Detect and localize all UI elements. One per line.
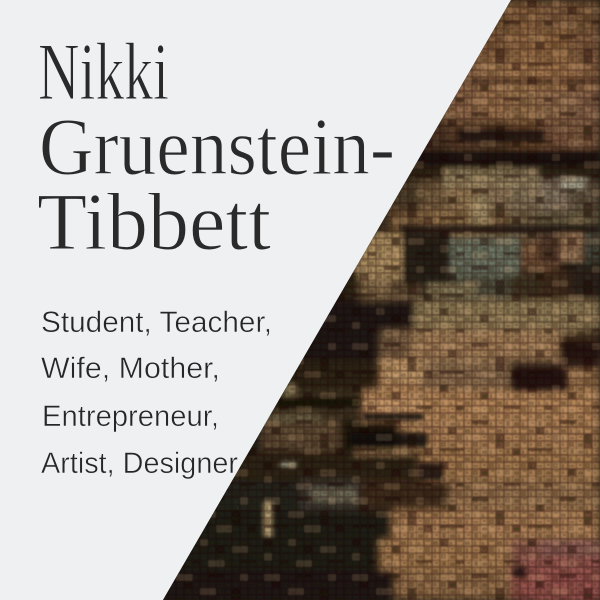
roles text block: Entrepreneur, (42, 400, 219, 433)
title (37, 26, 395, 267)
roles text block: Wife, Mother, (41, 352, 220, 385)
mosaic portrait image (150, 0, 600, 600)
roles text block (41, 306, 272, 480)
roles text block: Artist, Designer (41, 447, 238, 480)
title: Gruenstein- (39, 101, 395, 192)
roles text block: Student, Teacher, (41, 306, 272, 339)
title: Tibbett (37, 176, 271, 267)
title: Nikki (38, 26, 169, 117)
